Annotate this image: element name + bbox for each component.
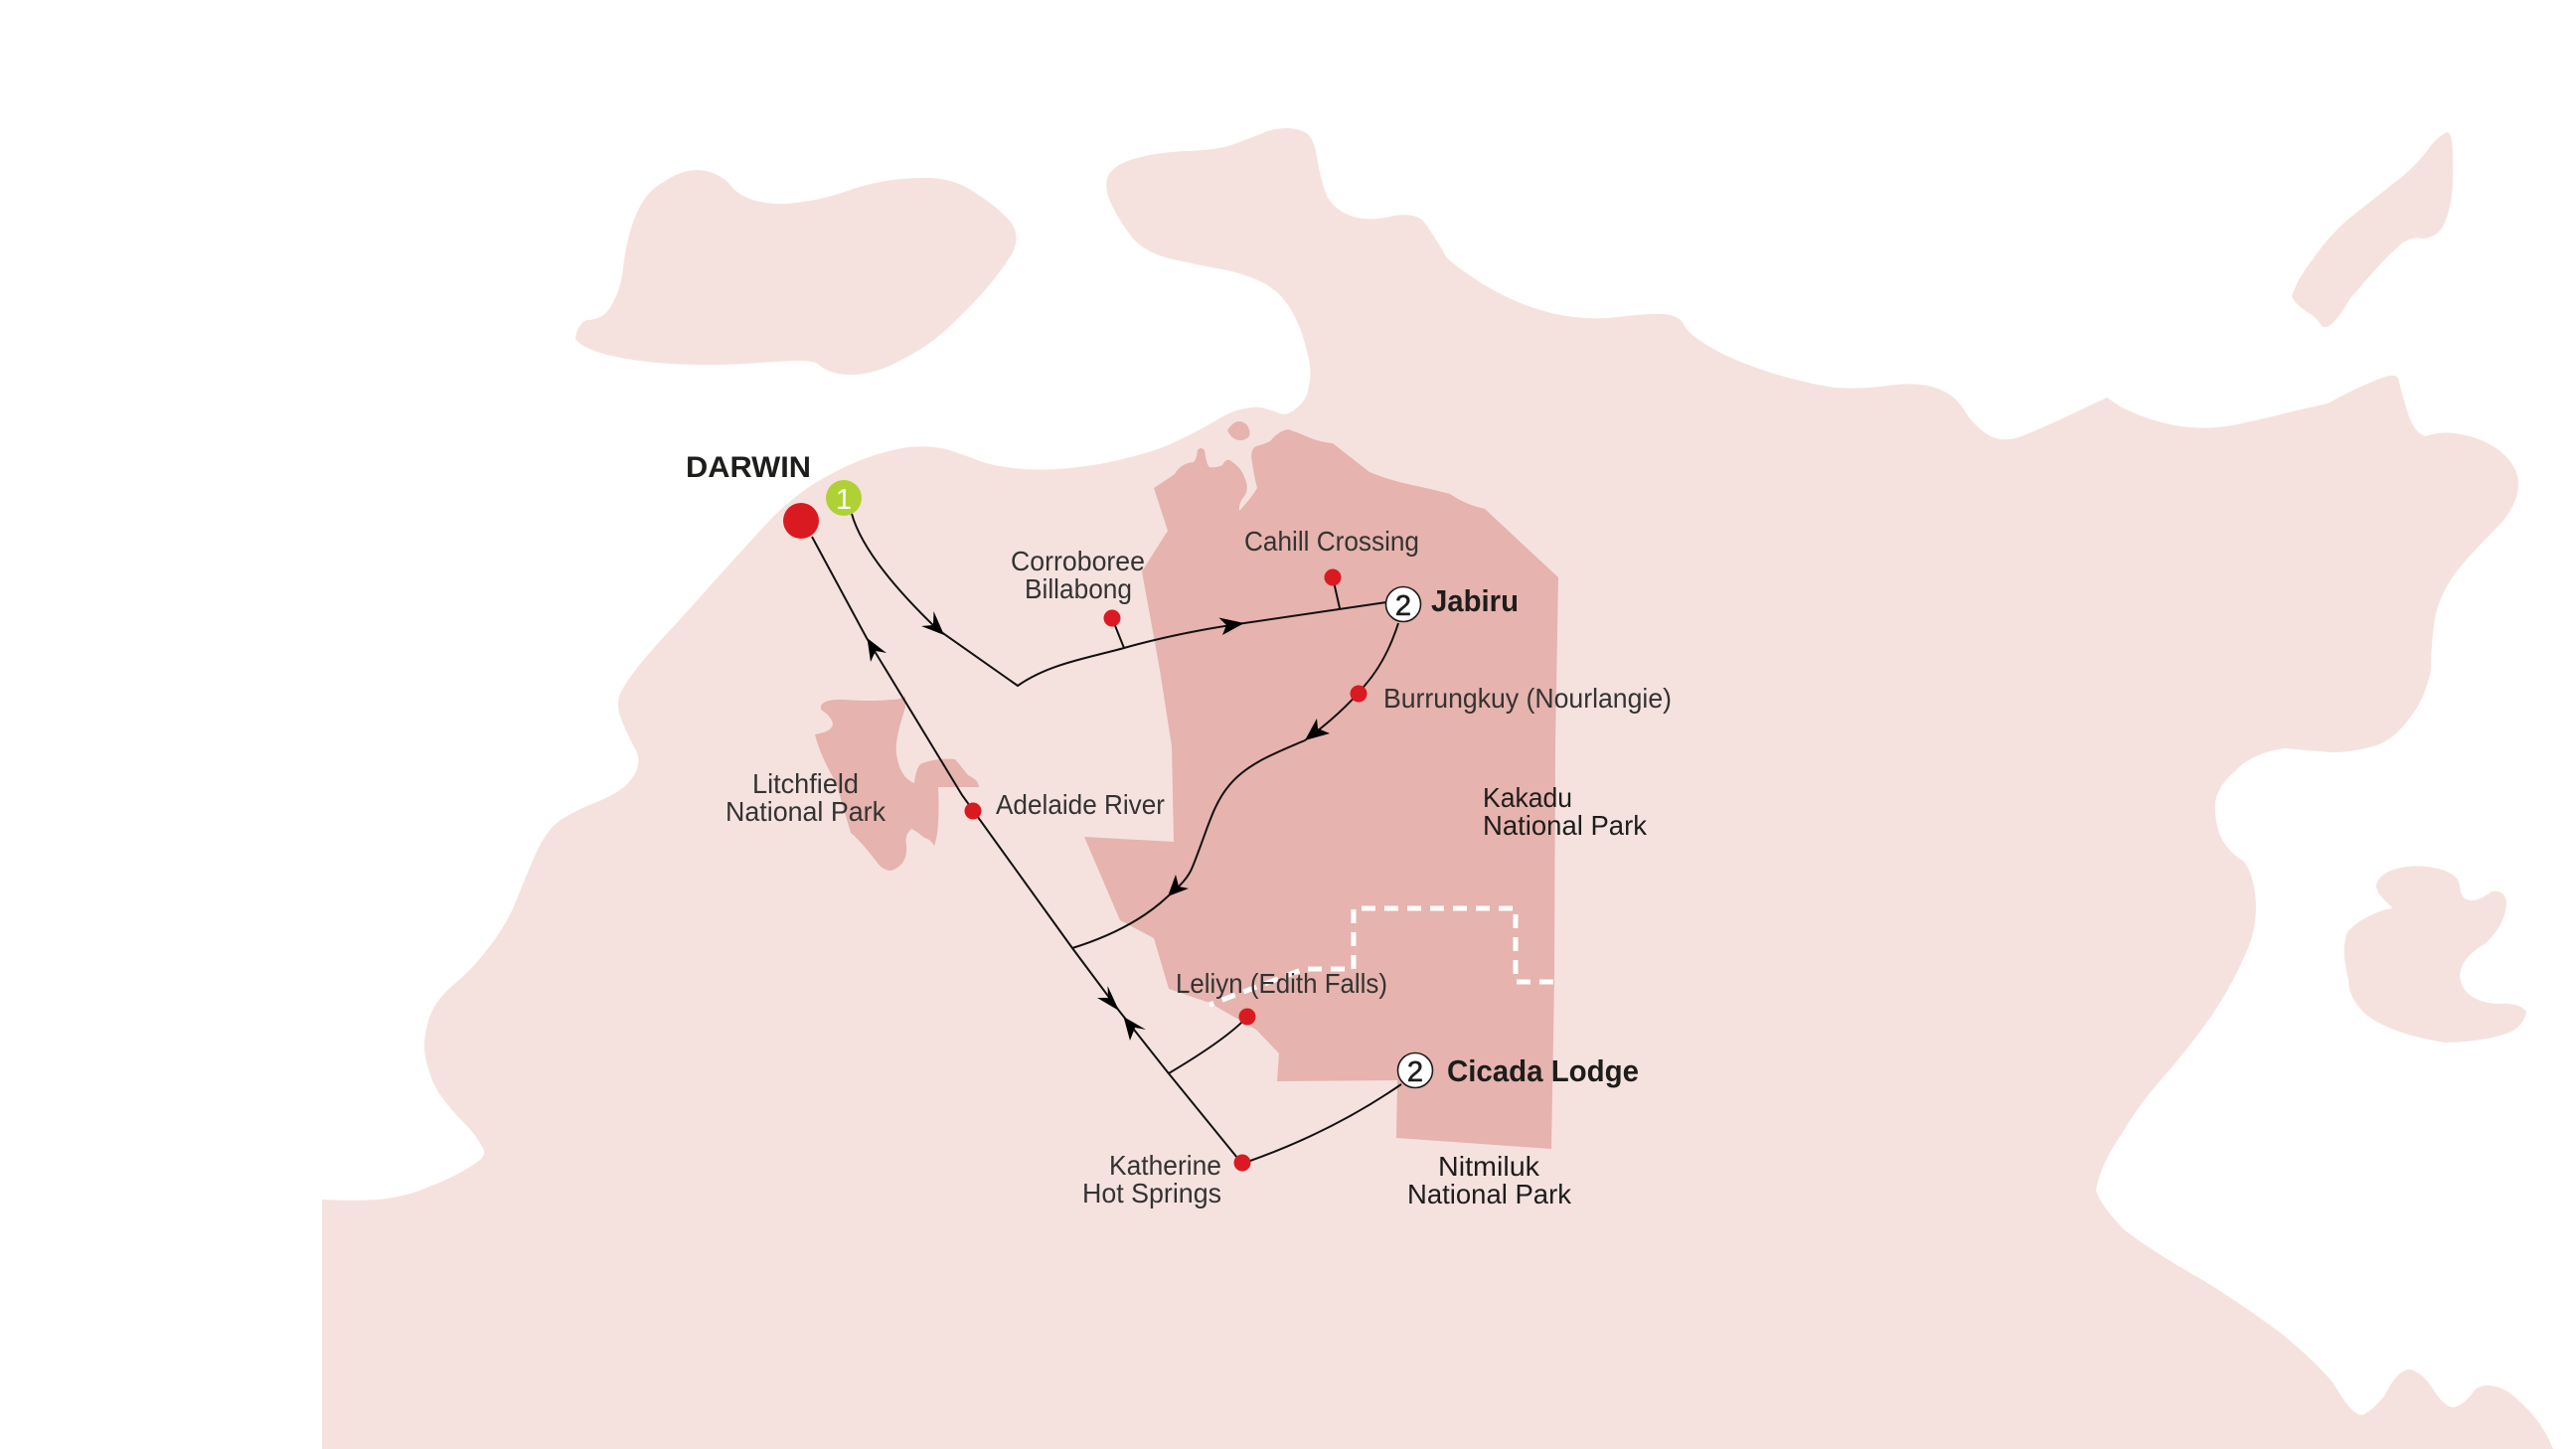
label: Corroboree Billabong: Corroboree [1011,546,1145,576]
label: Nitmiluk National Park [1407,1151,1572,1209]
land: south-east island [2344,866,2526,1043]
marker: Jabiru 2 nights [1385,586,1421,622]
route: Jabiru to the main road via Burrungkuy [1072,623,1398,948]
marker: Cicada Lodge 2 nights [1397,1053,1433,1088]
route: Leliyn spur [1169,1017,1247,1073]
label: Litchfield National Park: Litchfield [752,768,859,799]
marker: start day 1: 1 [836,484,852,516]
land: mainland [322,128,2553,1449]
label: Cicada Lodge: Cicada Lodge [1447,1053,1639,1088]
marker: Corroboree Billabong [1103,610,1121,626]
label: Katherine Hot Springs: Hot Springs [1082,1178,1221,1208]
arrow: from Darwin start [921,611,944,635]
marker: Darwin [783,503,819,539]
arrow: toward Darwin [867,638,886,662]
label: Nitmiluk National Park: Nitmiluk [1438,1151,1540,1182]
arrow: toward Jabiru [1218,618,1244,635]
label: Kakadu National Park: Kakadu [1483,782,1572,813]
label: Adelaide River: Adelaide River [996,789,1165,820]
marker: Cahill Crossing [1324,568,1342,586]
label: Corroboree Billabong [1011,546,1145,604]
panel: islet off Kakadu [1227,421,1250,440]
dashed boundary between Kakadu and Nitmiluk [1209,908,1553,1005]
marker: start day 1 [826,480,862,516]
route: Darwin start to Jabiru [852,514,1386,686]
route: Corroboree Billabong spur [1112,618,1124,648]
label: Litchfield National Park: National Park [725,796,886,827]
label: Leliyn (Edith Falls): Leliyn (Edith Falls) [1176,968,1387,999]
label: Cahill Crossing: Cahill Crossing [1244,526,1419,557]
marker: Cicada Lodge 2 nights: 2 [1407,1056,1423,1088]
land: north-east island [2292,132,2453,327]
route: Katherine to Cicada Lodge [1250,1084,1401,1161]
marker: Burrungkuy [1350,686,1368,702]
arrow: toward main road [1168,875,1189,896]
label: Litchfield National Park [725,768,886,827]
label: Katherine Hot Springs: Katherine [1109,1150,1221,1181]
label: Darwin: DARWIN [686,451,811,484]
route: Darwin to Katherine Hot Springs line [812,537,1237,1158]
land: north-west island [575,170,1017,375]
marker: Katherine Hot Springs [1234,1155,1250,1171]
marker: Jabiru 2 nights: 2 [1395,590,1411,622]
route: Cahill Crossing spur [1333,577,1340,608]
label: Burrungkuy (Nourlangie): Burrungkuy (Nourlangie) [1383,683,1672,714]
label: Kakadu National Park: National Park [1483,810,1648,841]
marker: Leliyn [1238,1008,1256,1026]
label: Nitmiluk National Park: National Park [1407,1179,1572,1209]
label: Jabiru: Jabiru [1431,583,1519,618]
label: Kakadu National Park [1483,782,1648,841]
panel: Kakadu and Nitmiluk national park area [1084,429,1558,1149]
panel: Litchfield National Park area [815,696,979,871]
arrow: up main road [1123,1017,1146,1041]
label: Corroboree Billabong: Billabong [1025,573,1132,604]
label: Katherine Hot Springs [1082,1150,1221,1208]
marker: Adelaide River [964,803,982,819]
arrow: down main road [1097,986,1119,1011]
arrow: below Burrungkuy [1305,719,1330,740]
